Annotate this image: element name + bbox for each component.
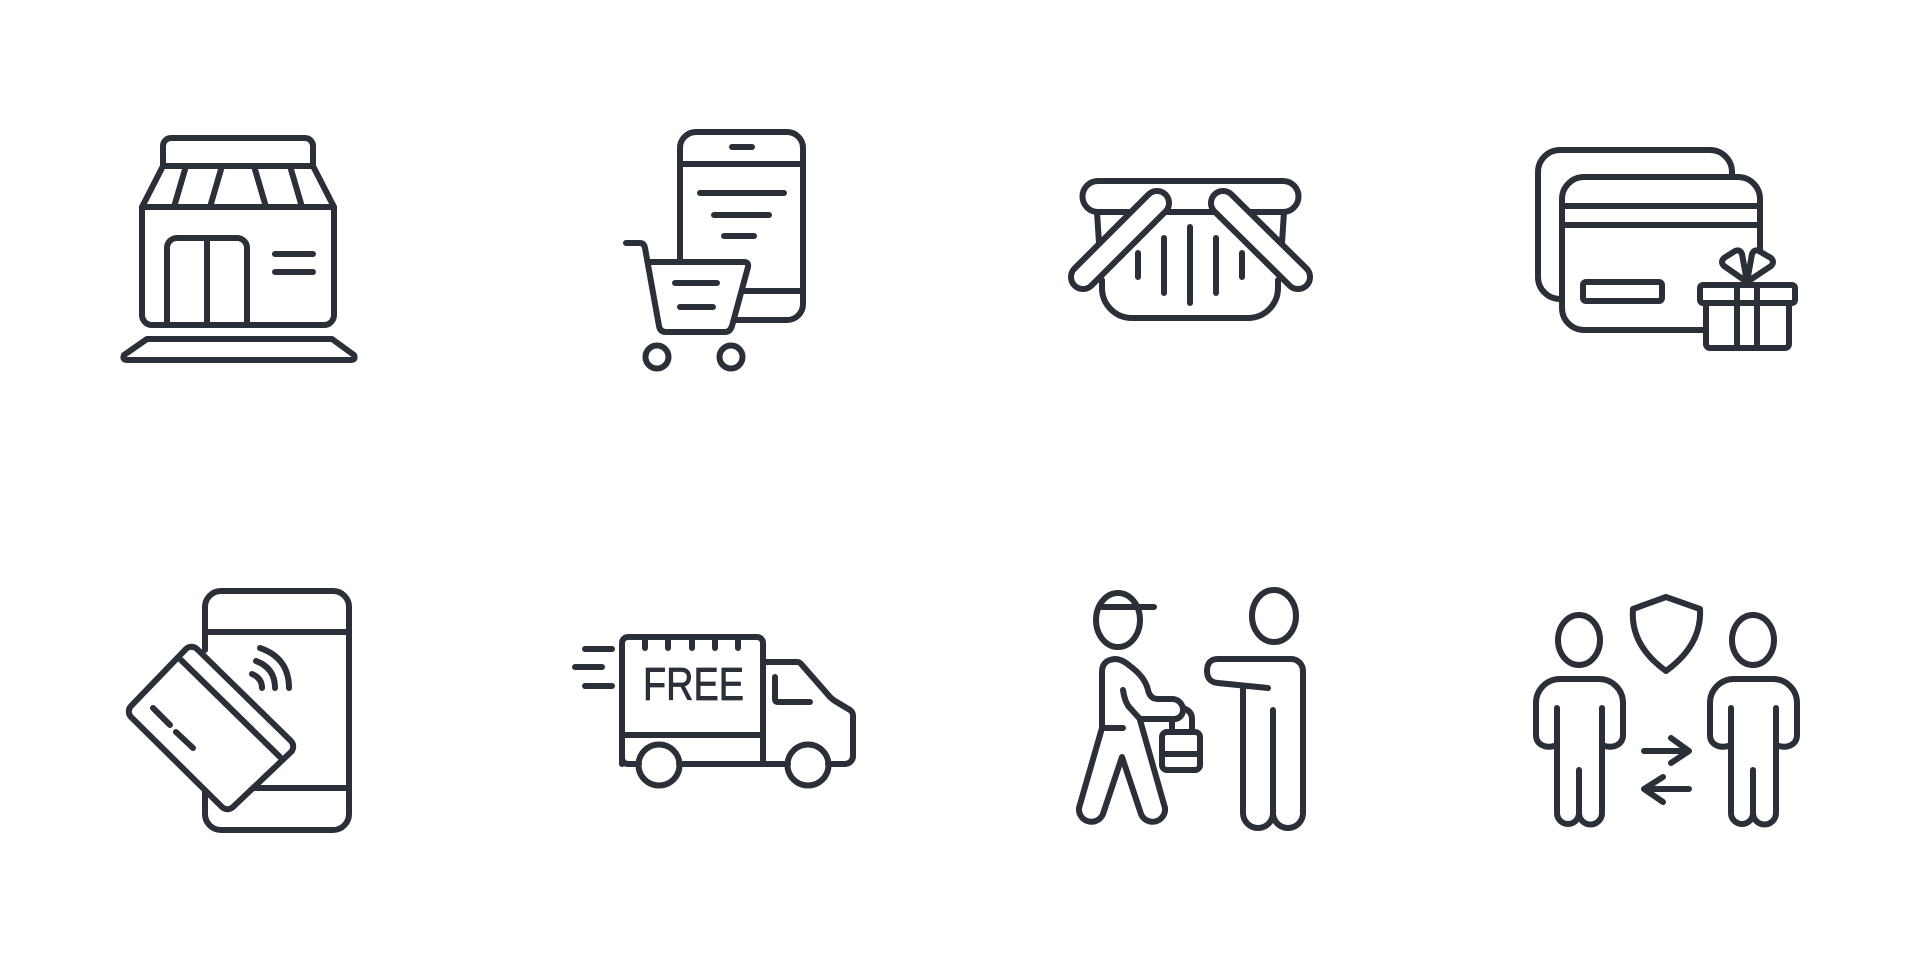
icon: free delivery truck xyxy=(575,637,853,786)
icon: courier handing parcel to customer xyxy=(1079,590,1303,828)
icon: contactless card payment xyxy=(129,591,349,830)
icon: gift card xyxy=(1538,150,1795,348)
icon: shopping basket xyxy=(1071,181,1310,318)
label: free: FREE xyxy=(643,658,744,710)
icon: storefront xyxy=(123,138,355,360)
icon: two people with shield exchange xyxy=(1536,597,1797,824)
icon: mobile shopping cart xyxy=(626,132,803,368)
